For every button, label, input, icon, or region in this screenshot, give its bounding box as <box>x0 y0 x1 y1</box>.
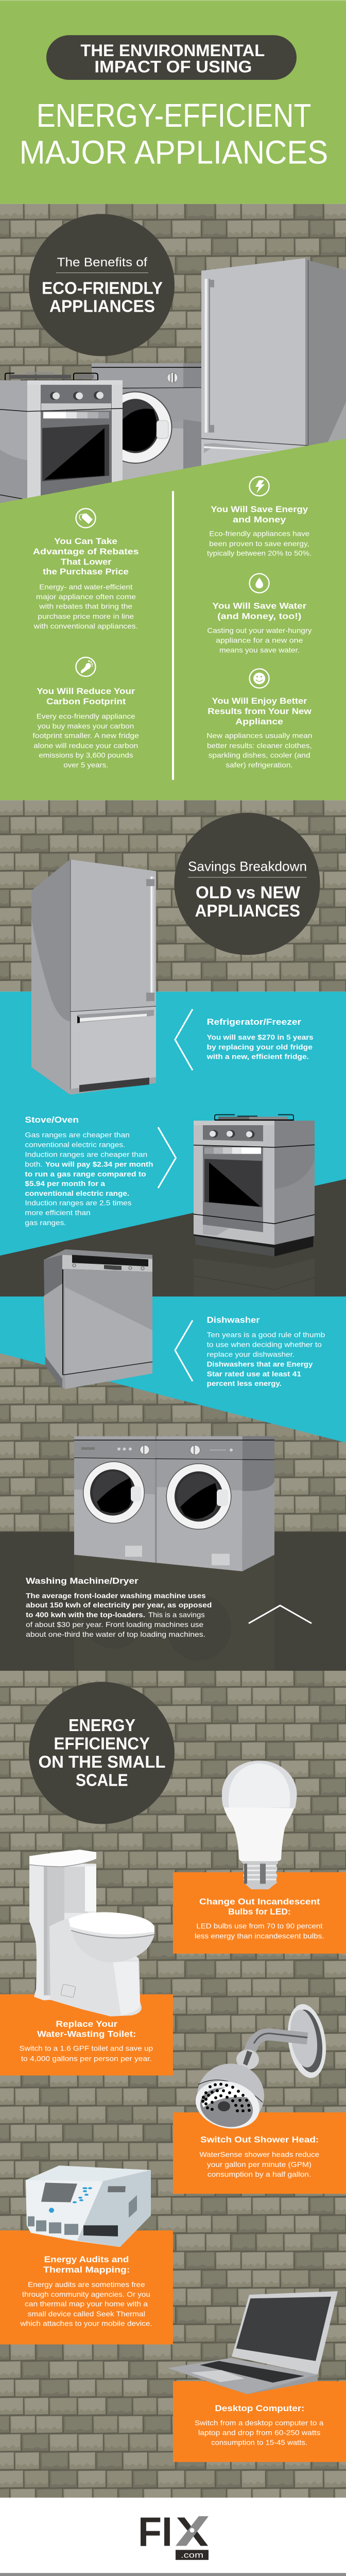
heading circle: small scale <box>29 1682 175 1824</box>
benefit: rebates: You Can Take <box>54 536 117 546</box>
heading circle: small scale: SCALE <box>76 1771 128 1790</box>
callout: stove: gas ranges. <box>25 1219 66 1227</box>
header pill <box>46 35 297 80</box>
item: toilet <box>0 1850 173 2075</box>
benefit: carbon footprint: you buy makes your carbon <box>38 722 134 731</box>
icon: dishwasher <box>44 1249 152 1389</box>
callout: stove: more efficient than <box>25 1209 91 1217</box>
brick wall with appliances: benefits <box>0 204 346 515</box>
item: toilet: Switch to a 1.6 GPF toilet and save up <box>20 2045 153 2053</box>
benefit: carbon footprint: emissions by 3,600 pounds <box>39 752 133 759</box>
callout: refrigerator: Refrigerator/Freezer <box>207 1016 301 1027</box>
item: LED bulb: less energy than incandescent bulbs. <box>195 1933 324 1941</box>
heading circle: benefits: ECO-FRIENDLY <box>42 279 163 298</box>
callout: washing machine: of about $30 per year. Front loading machines use <box>26 1621 203 1629</box>
item: LED bulb: Change Out Incandescent <box>199 1896 320 1906</box>
divider <box>172 491 174 780</box>
icon: refrigerator <box>201 258 346 507</box>
item: shower head <box>173 2002 346 2194</box>
callout: refrigerator: You will save $270 in 5 years <box>207 1033 314 1042</box>
callout: washing machine: to 400 kwh with the top-loaders. <box>26 1611 145 1619</box>
item: laptop: consumption to 15-45 watts. <box>211 2439 307 2447</box>
heading circle: old vs new <box>174 813 320 955</box>
callout: stove: conventional electric ranges. <box>25 1141 125 1149</box>
benefit: better results: sparkling dishes, cooler (and <box>209 752 310 759</box>
benefit: save energy: typically between 20% to 50%. <box>207 550 312 557</box>
callout: washing machine <box>26 1575 312 1639</box>
benefit: better results: New appliances usually mean <box>206 732 312 740</box>
icon: price tag <box>76 509 96 528</box>
icon: washing machine <box>92 363 201 509</box>
heading circle: small scale: ON THE SMALL <box>38 1753 166 1772</box>
footer logo <box>138 2509 209 2560</box>
item: LED bulb <box>173 1761 346 1954</box>
callout: stove: Induction ranges are cheaper than <box>25 1151 147 1159</box>
callout: dishwasher: replace your dishwasher. <box>207 1351 295 1359</box>
benefit: better results: Appliance <box>235 716 283 726</box>
benefit: save water: You Will Save Water <box>212 601 307 611</box>
header pill: THE ENVIRONMENTAL <box>80 41 265 60</box>
callout: stove: You will pay $2.34 per month <box>45 1161 153 1168</box>
header pill: IMPACT OF USING <box>94 57 252 76</box>
footer logo: FI <box>138 2509 172 2555</box>
benefit: carbon footprint: Carbon Footprint <box>46 696 126 706</box>
benefit: rebates: Energy- and water-efficient <box>39 583 132 591</box>
item: shower head: Switch Out Shower Head: <box>200 2134 319 2144</box>
benefit: carbon footprint: footprint smaller. A new fridge <box>32 732 139 740</box>
callout: dishwasher: Ten years is a good rule of thumb <box>207 1331 325 1340</box>
benefit: rebates: with rebates that bring the <box>39 603 132 611</box>
icon: laptop <box>168 2291 338 2394</box>
item: toilet: Water-Wasting Toilet: <box>37 2028 136 2039</box>
icon: shower head <box>190 2002 331 2136</box>
callout: washing machine: The average front-loader washing machine uses <box>26 1592 206 1600</box>
benefit: rebates: That Lower <box>61 556 112 567</box>
icon: water drop <box>250 573 269 593</box>
panel: savings breakdown <box>0 800 346 1671</box>
benefit: carbon footprint: You Will Reduce Your <box>37 686 135 696</box>
panel: benefits <box>0 438 346 800</box>
icon: bottom-freezer refrigerator <box>31 859 156 1095</box>
benefit: carbon footprint: Every eco-friendly appliance <box>37 713 135 721</box>
callout: dishwasher: to use when deciding whether to <box>207 1341 322 1349</box>
benefit: save water: Casting out your water-hungry <box>207 627 312 635</box>
benefit: rebates: Advantage of Rebates <box>33 546 139 556</box>
item: energy audits: which attaches to your mobile device. <box>20 2320 152 2328</box>
benefit: rebates: with conventional appliances. <box>33 622 138 631</box>
chevron arrow <box>158 1127 176 1188</box>
chevron arrow <box>175 1009 193 1070</box>
callout: washing machine: Washing Machine/Dryer <box>26 1575 139 1586</box>
benefit: save water: appliance for a new one <box>216 637 303 645</box>
benefit: better results: Results from Your New <box>207 706 312 716</box>
item: laptop: Switch from a desktop computer to a <box>195 2419 323 2427</box>
callout: stove: both. <box>25 1161 43 1168</box>
benefit: rebates <box>33 509 139 631</box>
benefit: better results: You Will Enjoy Better <box>212 696 307 706</box>
heading circle: benefits <box>29 214 175 356</box>
item: energy audits: Energy Audits and <box>44 2254 129 2264</box>
icon: LED bulb <box>222 1761 297 1889</box>
benefit: save water: means you save water. <box>219 647 300 655</box>
heading circle: benefits: APPLIANCES <box>49 297 155 316</box>
callout: stove: Stove/Oven <box>25 1114 79 1125</box>
item: energy audits: through community agencies. Or you <box>22 2291 150 2299</box>
benefit: better results: better results: cleaner clothes, <box>207 742 312 750</box>
callout: dishwasher: Star rated use at least 41 <box>207 1370 301 1379</box>
panel: small scale <box>0 1671 346 2498</box>
main title <box>20 97 328 171</box>
benefit: better results <box>206 669 312 769</box>
benefit: save energy: and Money <box>233 514 286 524</box>
callout: stove: Gas ranges are cheaper than <box>25 1131 130 1139</box>
item: toilet: Replace Your <box>56 2019 117 2029</box>
item: shower head: consumption by a half gallon. <box>207 2171 311 2179</box>
callout: dishwasher: Dishwasher <box>207 1314 260 1325</box>
item: energy audits: can thermal map your home with a <box>25 2300 148 2308</box>
benefit: rebates: purchase price more in line <box>38 613 134 621</box>
icon: stove <box>0 372 123 507</box>
callout: stove: conventional electric range. <box>25 1190 129 1198</box>
heading circle: old vs new: APPLIANCES <box>195 902 300 921</box>
benefit: rebates: the Purchase Price <box>43 566 129 577</box>
callout: stove: Induction ranges are 2.5 times <box>25 1199 131 1208</box>
item: energy audits: Energy audits are sometimes free <box>28 2281 145 2289</box>
benefit: better results: safer) refrigeration. <box>226 761 293 769</box>
item: shower head: your gallon per minute (GPM) <box>207 2161 312 2169</box>
callout: dishwasher <box>175 1314 325 1388</box>
heading circle: small scale: ENERGY <box>68 1716 135 1735</box>
heading circle: small scale: EFFICIENCY <box>54 1735 150 1753</box>
item: laptop <box>168 2291 346 2462</box>
benefit: rebates: major appliance often come <box>36 593 136 601</box>
item: laptop: Desktop Computer: <box>215 2403 304 2413</box>
callout: washing machine: about one-third the water of top loading machines. <box>26 1631 205 1639</box>
callout: stove: $5.94 per month for a <box>25 1180 106 1188</box>
chevron arrow <box>175 1320 193 1381</box>
icon: lightning bolt <box>250 477 269 496</box>
item: energy audits: Thermal Mapping: <box>43 2264 130 2275</box>
callout: stove <box>25 1114 176 1227</box>
item: shower head: WaterSense shower heads reduce <box>199 2150 319 2159</box>
benefit: save water: (and Money, too!) <box>217 611 301 621</box>
icon: stove <box>194 1115 315 1297</box>
item: LED bulb: LED bulbs use from 70 to 90 percent <box>196 1922 323 1930</box>
footer logo: .com <box>181 2551 203 2560</box>
heading circle: benefits: The Benefits of <box>57 256 147 269</box>
benefit: save energy: Eco-friendly appliances have <box>209 530 309 538</box>
callout: refrigerator: with a new, efficient fridge. <box>206 1053 309 1061</box>
benefit: save energy: You Will Save Energy <box>211 504 308 514</box>
callout: dishwasher: percent less energy. <box>207 1380 282 1388</box>
icon: smiley <box>250 669 269 688</box>
chevron arrow <box>249 1605 312 1623</box>
heading circle: old vs new: OLD vs NEW <box>196 884 300 902</box>
icon: footprint <box>76 657 96 676</box>
footer logo: X <box>176 2509 209 2555</box>
header panel <box>0 0 346 204</box>
heading circle: old vs new: Savings Breakdown <box>188 859 307 874</box>
icon: washer and dryer <box>74 1436 274 1671</box>
icon: thermal device <box>26 2165 151 2247</box>
callout: washing machine: about 150 kwh of electricity per year, as opposed <box>26 1601 212 1609</box>
callout: stove: to run a gas range compared to <box>25 1171 146 1178</box>
item: energy audits <box>0 2165 173 2345</box>
benefit: save energy: been proven to save energy, <box>209 540 309 548</box>
callout: refrigerator <box>175 1009 314 1070</box>
callout: dishwasher: Dishwashers that are Energy <box>207 1361 313 1369</box>
icon: toilet <box>29 1850 154 2016</box>
benefit: save energy <box>207 477 312 557</box>
benefit: carbon footprint: alone will reduce your carbon <box>33 742 138 750</box>
item: energy audits: small device called Seek Thermal <box>28 2310 145 2318</box>
callout: washing machine: This is a savings <box>148 1611 205 1619</box>
benefit: save water <box>207 573 312 655</box>
item: laptop: laptop and drop from 60-250 watts <box>198 2429 320 2437</box>
benefit: carbon footprint <box>32 657 139 769</box>
item: LED bulb: Bulbs for LED: <box>228 1906 291 1917</box>
callout: refrigerator: by replacing your old fridge <box>207 1043 313 1052</box>
benefit: carbon footprint: over 5 years. <box>63 761 108 769</box>
item: toilet: to 4,000 gallons per person per year. <box>21 2055 152 2063</box>
